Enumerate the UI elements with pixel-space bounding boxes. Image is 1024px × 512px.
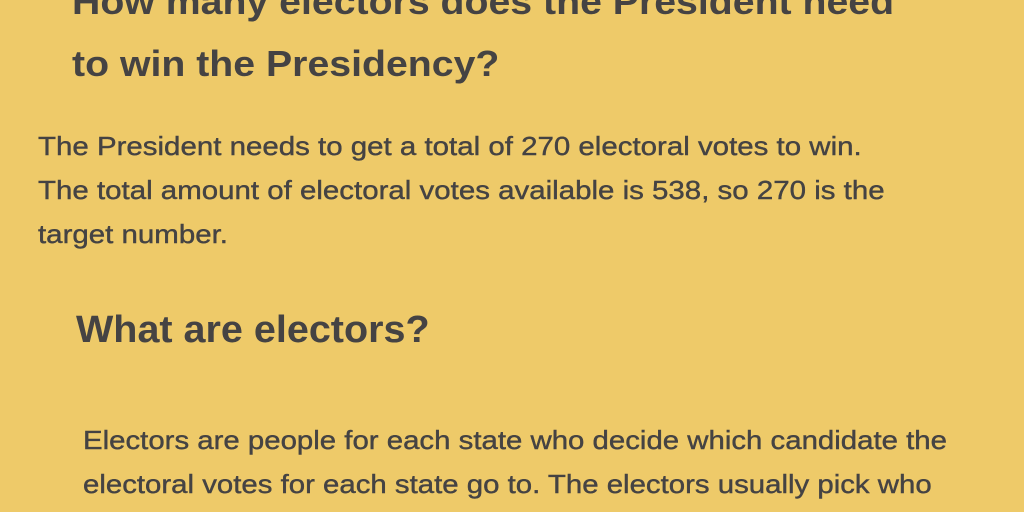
text block: electors definition [83, 425, 947, 499]
text block: 270 electoral votes: The total amount of electoral votes available is 538, so 270 is the [38, 175, 885, 205]
heading: what are electors: What are electors? [76, 309, 430, 351]
heading: how many electors: to win the Presidency? [72, 43, 499, 84]
text block: 270 electoral votes [38, 131, 885, 249]
text block: electors definition: Electors are people for each state who decide which candidate the [83, 425, 947, 455]
text block: 270 electoral votes: target number. [38, 219, 228, 249]
heading: how many electors [72, 0, 894, 84]
text block: electors definition: electoral votes for each state go to. The electors usually pick who [83, 469, 932, 499]
text block: 270 electoral votes: The President needs to get a total of 270 electoral votes to win. [38, 131, 862, 161]
